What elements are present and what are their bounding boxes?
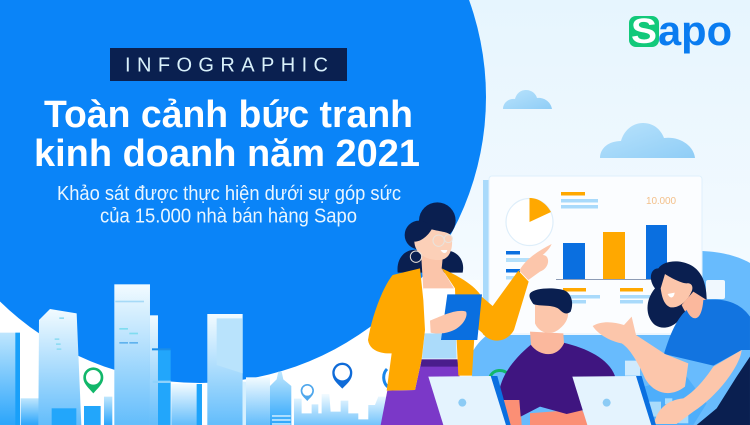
title — [34, 94, 420, 175]
presentation board — [483, 176, 702, 335]
logo: Sapo: S — [631, 12, 657, 51]
face — [414, 229, 452, 260]
arms — [500, 397, 590, 425]
glasses and earring — [410, 235, 452, 262]
cloud: small — [503, 90, 552, 109]
laptop right — [572, 376, 656, 425]
skirt — [381, 359, 466, 425]
map pin: green — [83, 367, 103, 393]
arm front — [654, 350, 742, 424]
map pin: light blue — [301, 384, 314, 401]
laptop left — [428, 376, 511, 425]
hair — [529, 288, 572, 313]
face — [661, 274, 692, 307]
city skyline — [0, 284, 387, 425]
woman with clipboard — [368, 202, 552, 425]
jacket — [368, 268, 425, 391]
subtitle: của 15.000 nhà bán hàng Sapo — [100, 206, 357, 228]
map pin: dark blue — [332, 363, 352, 389]
pins behind figures — [384, 369, 510, 387]
title: kinh doanh năm 2021 — [34, 133, 420, 175]
blue hill behind desk — [472, 251, 750, 425]
bar chart — [556, 225, 667, 280]
woman in blue shirt — [593, 261, 750, 425]
hand on clipboard — [430, 311, 467, 334]
legend lines top — [561, 192, 598, 208]
smile — [668, 293, 675, 297]
jacket right and sleeve — [442, 268, 529, 376]
badge: INFOGRAPHIC: INFOGRAPHIC — [125, 54, 328, 76]
neck — [530, 332, 564, 354]
trousers — [697, 357, 750, 425]
badge: INFOGRAPHIC — [110, 48, 347, 81]
pointing hand — [519, 244, 552, 280]
hair back — [647, 261, 707, 328]
shirt — [664, 299, 750, 366]
arms — [593, 317, 688, 393]
small white box right — [706, 280, 725, 299]
legend lines bottom — [563, 288, 650, 304]
man at laptop — [498, 288, 615, 425]
blouse — [422, 288, 457, 359]
blue circle backdrop — [0, 0, 486, 383]
subtitle: Khảo sát được thực hiện dưới sự góp sức — [57, 183, 401, 205]
title: Toàn cảnh bức tranh — [44, 94, 413, 136]
smile — [441, 250, 447, 253]
clipboard — [441, 294, 482, 340]
logo: Sapo: apo — [658, 7, 732, 54]
pie chart — [506, 198, 553, 246]
shirt — [498, 343, 615, 417]
neck — [682, 292, 707, 321]
white ground band — [0, 280, 480, 425]
legend lines left — [506, 251, 530, 280]
screens behind right woman — [625, 361, 707, 425]
value label: 10.000 — [646, 196, 676, 207]
subtitle — [57, 183, 401, 228]
neck and chest — [421, 247, 455, 290]
cloud: large — [600, 123, 695, 158]
hair — [397, 202, 463, 273]
head — [535, 300, 568, 333]
